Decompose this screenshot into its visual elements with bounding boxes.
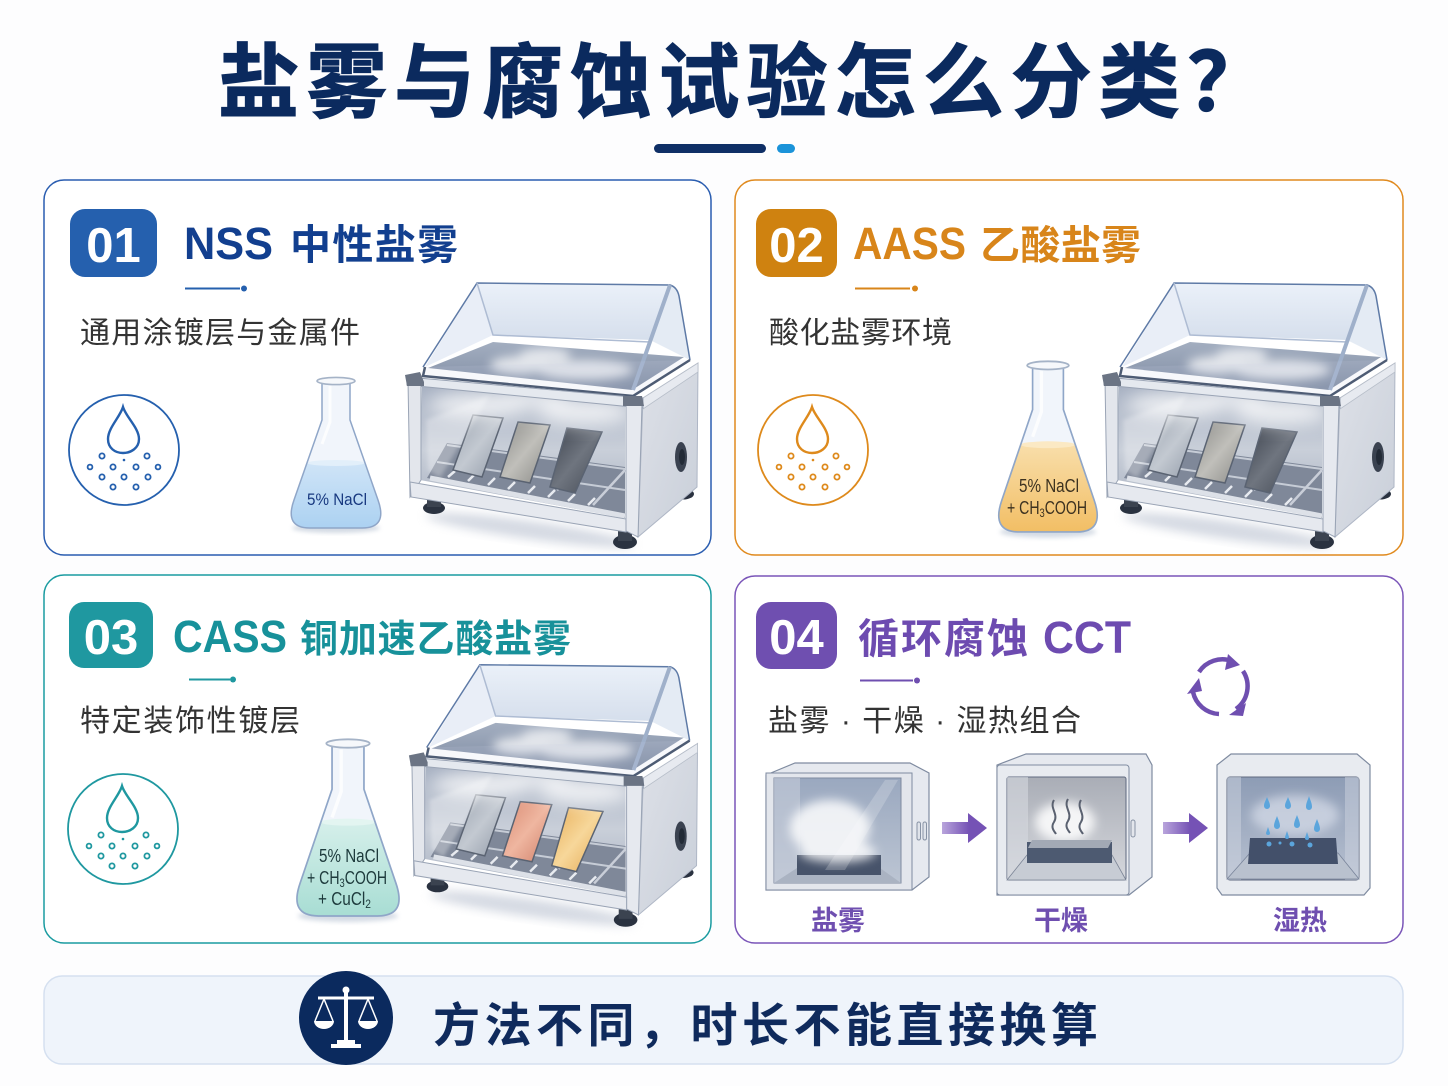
salt spray chamber 3 bbox=[409, 665, 698, 931]
step label: humid heat: 湿热 bbox=[1273, 906, 1327, 936]
flask: NaCl + acetic acid: 3 bbox=[1039, 506, 1045, 520]
description: 盐雾 · 干燥 · 湿热组合 bbox=[768, 705, 1081, 738]
panel: 03 CASS bbox=[44, 575, 711, 943]
step label: drying: 干燥 bbox=[1034, 906, 1088, 936]
description: 特定装饰性镀层 bbox=[80, 705, 300, 738]
arrow bbox=[942, 813, 987, 843]
heading underline bbox=[860, 678, 920, 684]
icon: cycle arrows bbox=[1187, 654, 1248, 716]
heading CASS: CASS bbox=[173, 611, 287, 662]
badge 02: 02 bbox=[769, 219, 824, 273]
icon: acidic droplet bbox=[758, 395, 868, 505]
badge 01: 01 bbox=[86, 219, 141, 273]
flask: 5% NaCl bbox=[286, 377, 386, 533]
heading CASS: 铜加速乙酸盐雾 bbox=[300, 619, 571, 661]
sample plates bbox=[453, 415, 602, 493]
arrow bbox=[1163, 813, 1208, 843]
sample plates bbox=[456, 795, 603, 872]
panel: 01 NSS bbox=[44, 180, 711, 555]
flask: NaCl + acetic acid + copper chloride: + CuCl bbox=[318, 889, 374, 909]
cabinet: salt spray bbox=[766, 763, 929, 890]
salt spray chamber 1 bbox=[405, 283, 698, 554]
step label: salt spray: 盐雾 bbox=[811, 906, 865, 936]
salt spray chamber 2 bbox=[1102, 283, 1395, 554]
sample plates bbox=[1148, 415, 1297, 493]
flask: NaCl + acetic acid: + CH bbox=[1007, 498, 1049, 518]
flask: NaCl + acetic acid + copper chloride: 5% NaCl bbox=[319, 846, 379, 866]
title underline accent bbox=[654, 144, 795, 153]
flask: NaCl + acetic acid bbox=[993, 361, 1103, 538]
heading underline bbox=[189, 676, 236, 682]
heading CCT: 循环腐蚀 bbox=[858, 616, 1028, 662]
badge 04: 04 bbox=[769, 611, 824, 665]
panel: 02 AASS bbox=[735, 180, 1403, 555]
flask: 5% NaCl: 5% NaCl bbox=[307, 490, 367, 509]
takeaway text: 方法不同，时长不能直接换算 bbox=[433, 999, 1098, 1052]
icon: balance scale bbox=[299, 971, 393, 1065]
flask: NaCl + acetic acid: 5% NaCl bbox=[1019, 476, 1079, 496]
description: 酸化盐雾环境 bbox=[769, 317, 952, 350]
badge 03: 03 bbox=[84, 611, 138, 665]
badge 01 bbox=[70, 209, 157, 277]
cabinet: humid heat bbox=[1217, 754, 1370, 895]
heading AASS: 乙酸盐雾 bbox=[980, 224, 1141, 268]
cabinet: drying bbox=[997, 754, 1152, 895]
heading CCT: CCT bbox=[1043, 612, 1131, 663]
badge 04 bbox=[756, 602, 837, 669]
flask: NaCl + acetic acid + copper chloride: COOH bbox=[345, 868, 387, 888]
icon: copper salt droplet bbox=[68, 774, 178, 884]
heading underline bbox=[185, 286, 247, 292]
badge 03 bbox=[69, 602, 153, 668]
flask: NaCl + acetic acid + copper chloride bbox=[291, 739, 405, 922]
heading underline bbox=[855, 286, 918, 292]
flask: NaCl + acetic acid + copper chloride: 2 bbox=[365, 897, 371, 911]
flask: NaCl + acetic acid + copper chloride: + CH bbox=[307, 868, 349, 888]
description: 通用涂镀层与金属件 bbox=[80, 317, 360, 350]
title: 盐雾与腐蚀试验怎么分类？ bbox=[218, 39, 1268, 129]
heading NSS: NSS bbox=[184, 218, 273, 269]
panel: 04 CCT bbox=[735, 576, 1403, 943]
heading NSS: 中性盐雾 bbox=[290, 222, 458, 268]
heading AASS: AASS bbox=[853, 218, 966, 269]
bottom takeaway banner bbox=[44, 971, 1403, 1065]
icon: salt droplet bbox=[69, 395, 179, 505]
badge 02 bbox=[756, 209, 837, 277]
flask: NaCl + acetic acid + copper chloride: 3 bbox=[339, 876, 345, 890]
flask: NaCl + acetic acid: COOH bbox=[1045, 498, 1087, 518]
